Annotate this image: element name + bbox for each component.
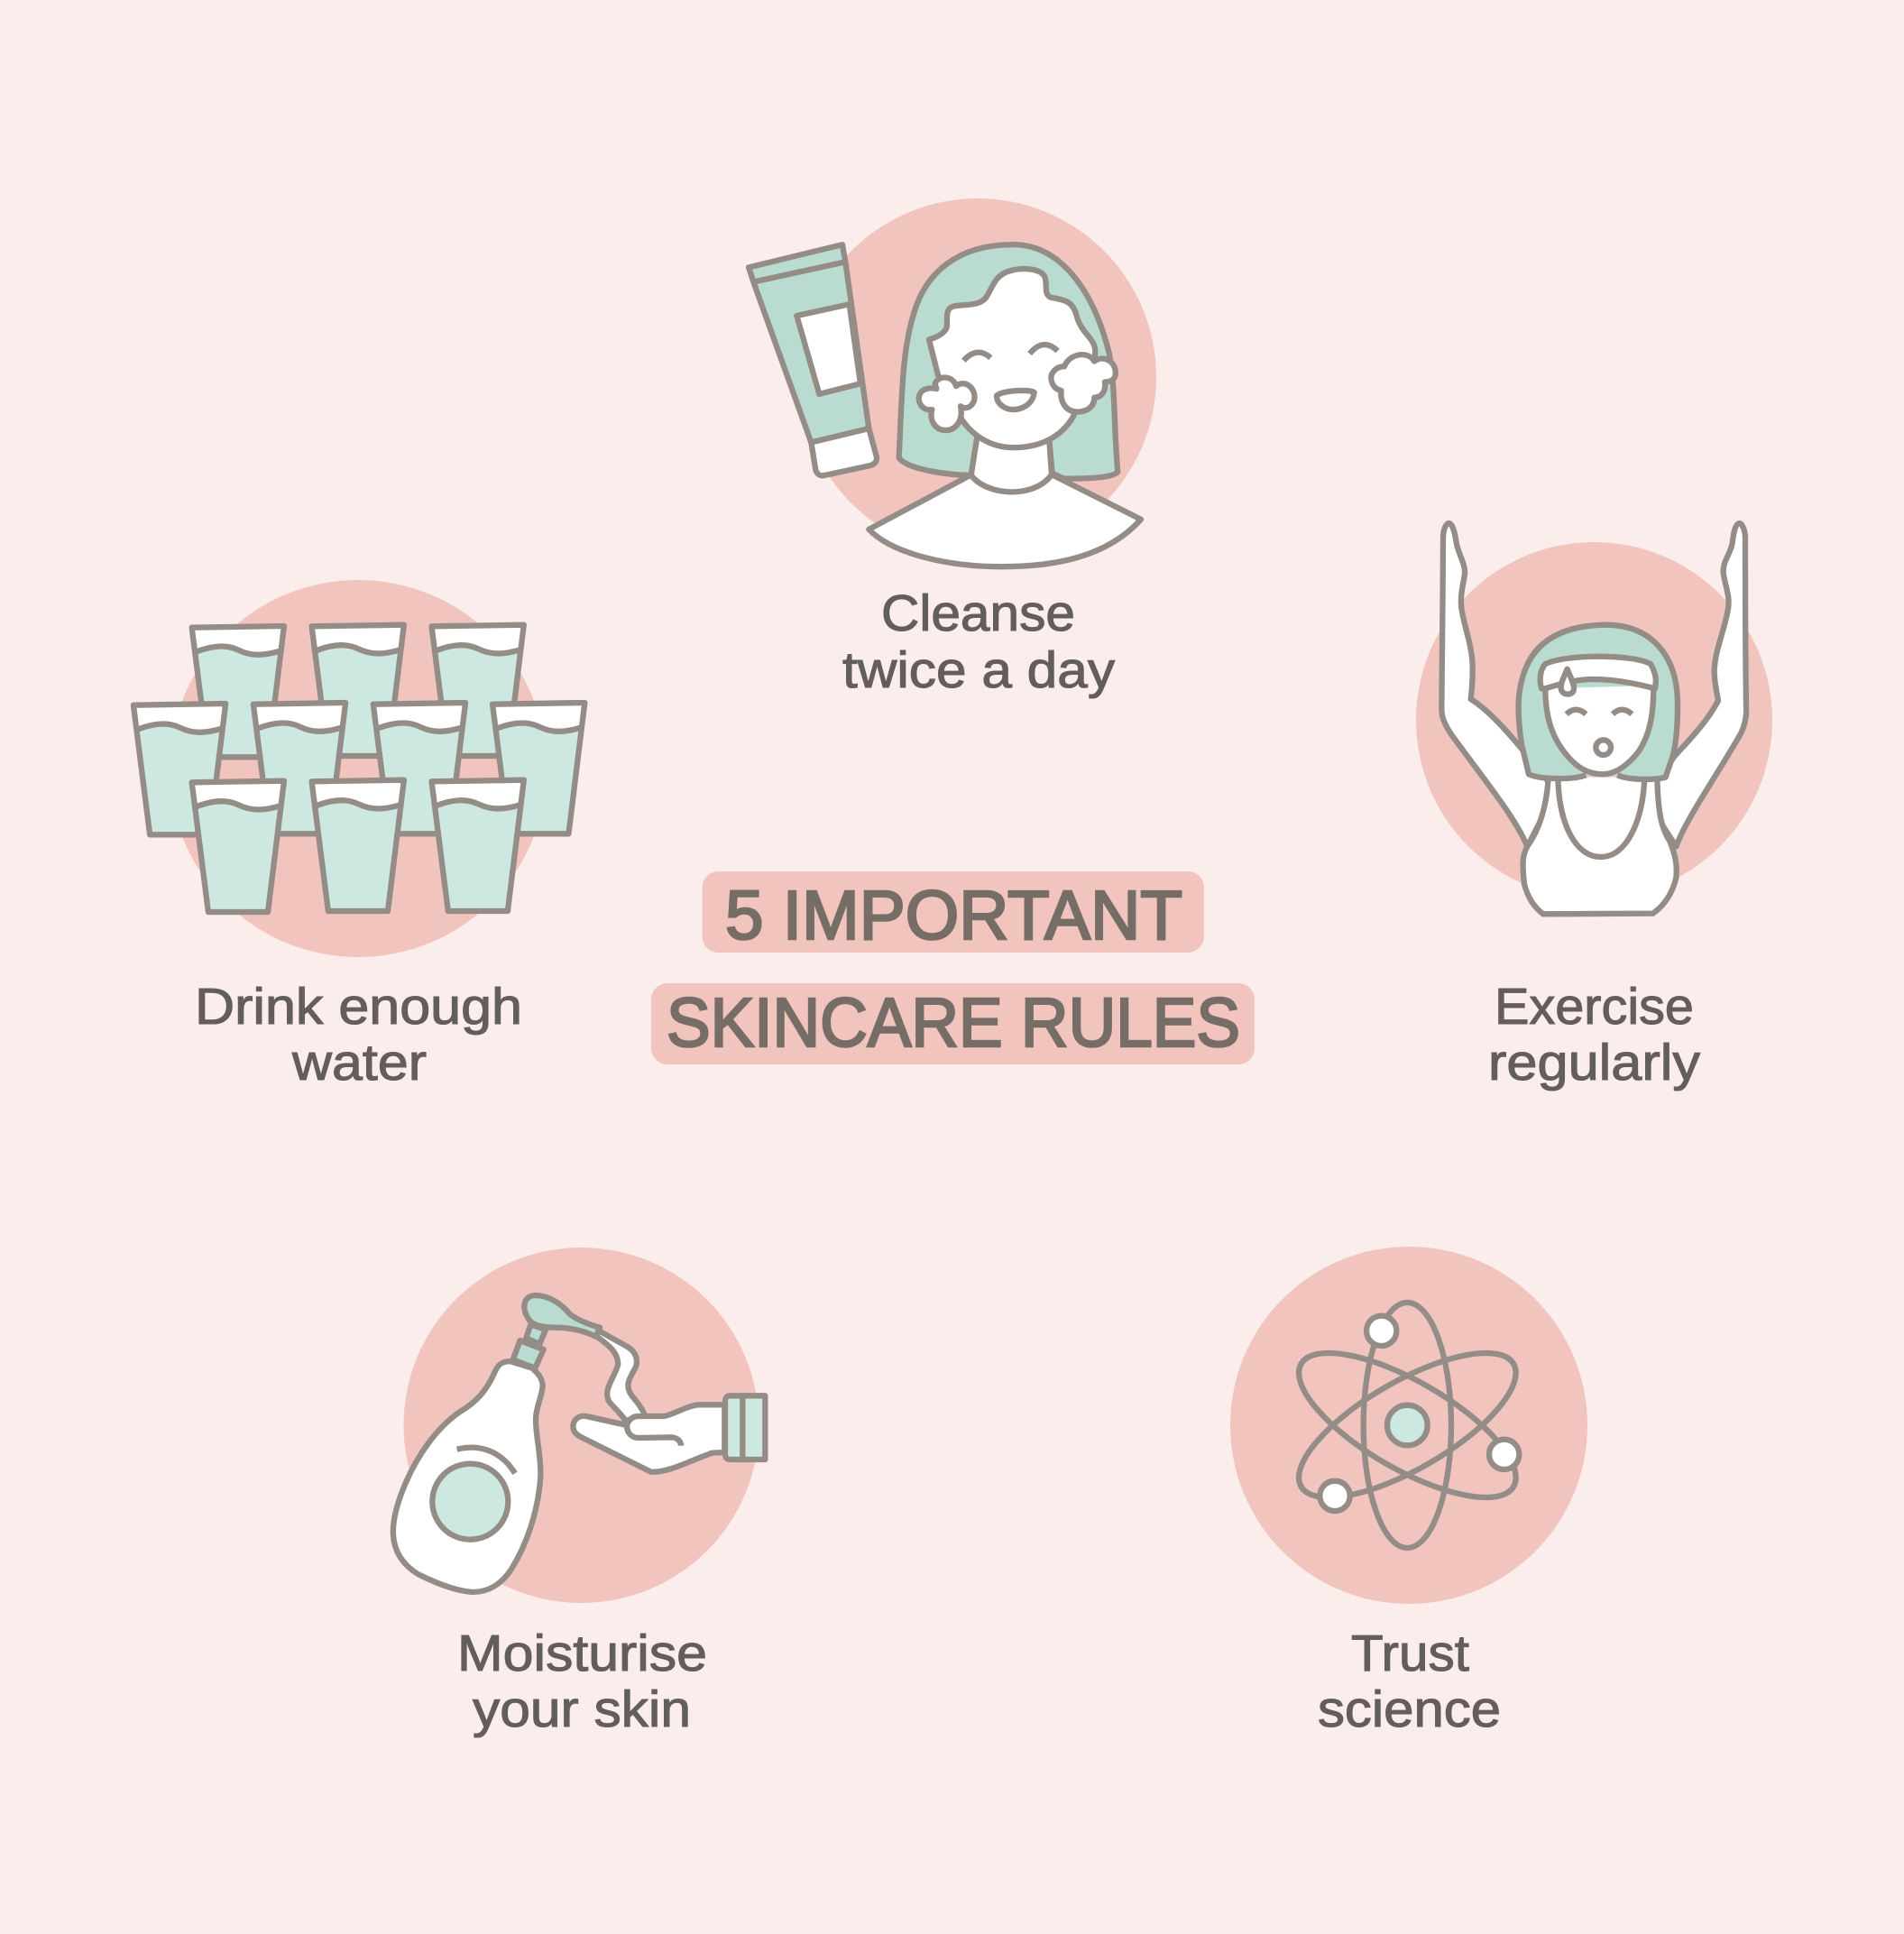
icon: sweat drop xyxy=(1561,669,1574,695)
icon: left foam xyxy=(919,377,975,430)
icon: face xyxy=(1545,686,1653,774)
icon: bottle label xyxy=(432,1464,508,1540)
background circle xyxy=(1230,1247,1587,1604)
icon: cuff xyxy=(725,1395,765,1460)
icon: right arm xyxy=(1657,523,1746,846)
label: moisturise your skin: your skin xyxy=(473,1681,691,1738)
icon: torso xyxy=(1523,778,1677,914)
label: trust science xyxy=(1318,1625,1501,1738)
icon: left arm xyxy=(1441,523,1549,846)
label: drink enough water xyxy=(195,978,522,1091)
background circle xyxy=(1416,542,1772,898)
label: cleanse twice a day: Cleanse xyxy=(881,585,1075,642)
icon: bottle xyxy=(393,1361,543,1592)
icon: atom xyxy=(1279,1303,1535,1548)
label: exercise regularly: regularly xyxy=(1488,1034,1701,1091)
icon: eyes xyxy=(963,345,1058,361)
icon: pump stem xyxy=(526,1324,546,1344)
background circle xyxy=(404,1248,759,1603)
panel: exercise regularly xyxy=(1416,523,1772,1091)
icon: woman exercising with raised arms xyxy=(1441,523,1746,914)
icon: cleanser tube and smiling woman with foam xyxy=(749,244,1141,566)
label: exercise regularly: Exercise xyxy=(1495,978,1694,1036)
icon: neckline xyxy=(1558,778,1644,857)
background circle xyxy=(799,198,1156,556)
icon: label arc xyxy=(457,1448,515,1473)
icon: electrons xyxy=(1320,1316,1519,1511)
label: moisturise your skin: Moisturise xyxy=(457,1625,707,1682)
panel: moisturise your skin xyxy=(393,1248,765,1738)
title line 2: SKINCARE RULES xyxy=(667,984,1240,1062)
icon: pump collar xyxy=(513,1340,544,1368)
icon: smile xyxy=(997,391,1035,410)
label: exercise regularly xyxy=(1488,978,1701,1091)
panel: cleanse twice a day xyxy=(749,198,1156,699)
label: trust science: Trust xyxy=(1351,1625,1469,1682)
title: 5 important skincare rules xyxy=(651,871,1255,1064)
title line 1: 5 IMPORTANT xyxy=(725,877,1182,954)
icon: closed eyes xyxy=(1567,710,1632,714)
icon: hair xyxy=(1519,625,1678,779)
icon: pump head xyxy=(524,1295,600,1337)
icon: hand xyxy=(573,1404,724,1472)
label: trust science: science xyxy=(1318,1681,1501,1738)
icon: face xyxy=(929,269,1095,447)
background circle xyxy=(170,580,547,957)
icon: neck xyxy=(971,437,1052,492)
icon: shirt xyxy=(869,474,1141,566)
label: cleanse twice a day: twice a day xyxy=(842,641,1116,699)
label: cleanse twice a day xyxy=(842,585,1116,699)
label: drink enough water: Drink enough xyxy=(195,978,522,1036)
icon: cream stream xyxy=(597,1331,645,1421)
icon: ten glasses of water xyxy=(133,625,584,912)
icon: nucleus xyxy=(1387,1405,1428,1445)
icon: cleanser tube xyxy=(749,244,877,475)
icon: headband xyxy=(1541,657,1656,688)
label: moisturise your skin xyxy=(457,1625,707,1738)
icon: pump bottle dispensing onto hand xyxy=(393,1295,765,1592)
label: drink enough water: water xyxy=(291,1034,427,1091)
icon: orbits xyxy=(1279,1303,1535,1548)
icon: thumb line xyxy=(627,1425,681,1446)
icon: mouth xyxy=(1596,740,1611,755)
panel: trust science xyxy=(1230,1247,1587,1738)
icon: right foam xyxy=(1051,355,1116,411)
icon: woman's hair xyxy=(899,244,1118,479)
panel: drink enough water xyxy=(133,580,584,1091)
